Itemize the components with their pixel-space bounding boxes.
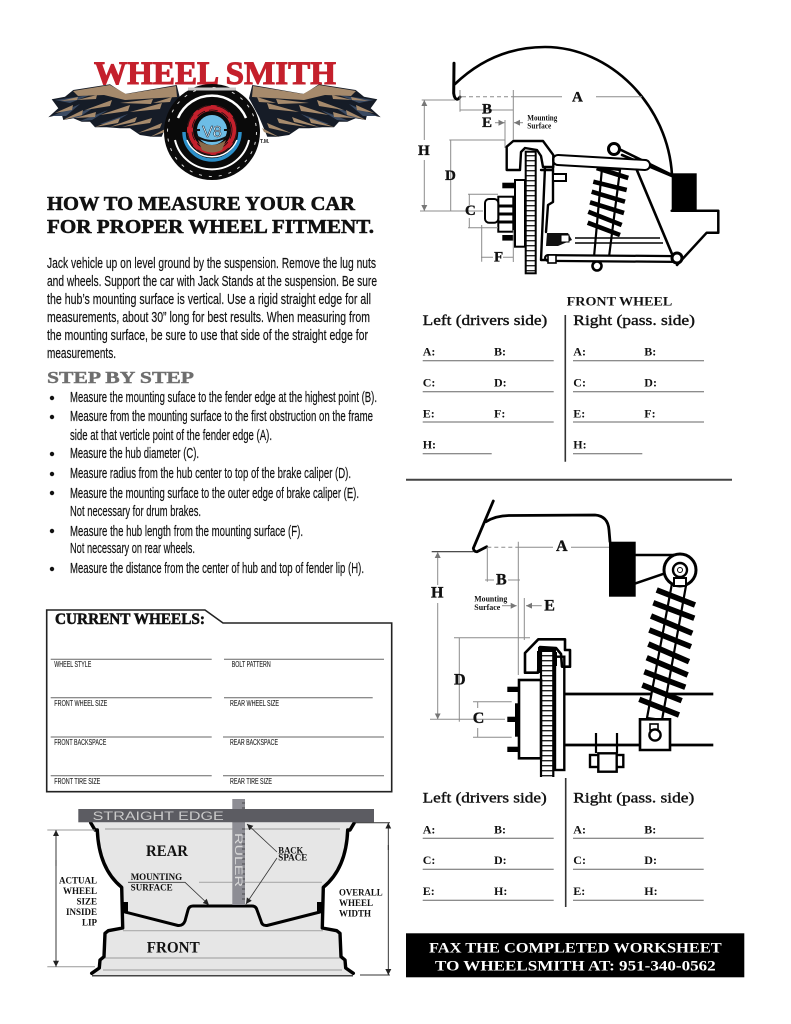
intro paragraph: Jack vehicle up on level ground by the suspension. Remove the lug nuts — [47, 255, 376, 272]
arrow: back space top — [247, 824, 277, 852]
label: actual wheel size: LIP — [82, 917, 97, 927]
frame rail — [609, 542, 636, 597]
field labels: F: — [644, 406, 656, 420]
intro paragraph: the mounting surface, be sure to use that side of the straight edge for — [47, 327, 368, 344]
icon: wheel badge: V8 — [202, 124, 222, 141]
title: FOR PROPER WHEEL FITMENT. — [47, 216, 374, 238]
field labels: H: — [644, 884, 658, 898]
intro paragraph: measurements. — [47, 345, 116, 362]
field lines — [423, 361, 704, 454]
column headings: Right (pass. side) — [573, 313, 695, 329]
dimension letters: E — [544, 598, 555, 615]
dimension letters: A — [556, 538, 568, 555]
step list — [50, 389, 377, 577]
label: mounting surface — [474, 594, 508, 612]
diagram: front suspension — [418, 47, 718, 273]
callout: fax banner — [406, 933, 744, 977]
label: actual wheel size: INSIDE — [66, 907, 97, 917]
spindle — [541, 167, 555, 260]
intro paragraph: the hub’s mounting surface is vertical. Use a rigid straight edge for all — [47, 291, 371, 308]
field labels: B: — [644, 345, 656, 359]
form labels: FRONT BACKSPACE — [54, 737, 106, 747]
heading: step by step: STEP BY STEP — [47, 368, 194, 387]
label: mounting surface: Mounting — [474, 594, 508, 604]
form labels: BOLT PATTERN — [232, 659, 271, 669]
frame — [672, 173, 697, 211]
panel heading: CURRENT WHEELS: — [55, 611, 205, 628]
field labels: C: — [573, 853, 586, 867]
callout: fax banner: TO WHEELSMITH AT: 951-340-0562 — [435, 959, 716, 975]
form heading: FRONT WHEEL — [567, 294, 673, 309]
field labels: A: — [423, 345, 435, 359]
dimension letters: B — [482, 102, 492, 118]
hub and studs — [507, 680, 541, 758]
label: mounting surface: Mounting — [527, 114, 557, 123]
form labels: FRONT TIRE SIZE — [54, 776, 101, 786]
field labels: A: — [423, 822, 435, 836]
dimension letters: H — [431, 585, 444, 602]
brake caliper — [507, 141, 553, 170]
title — [47, 193, 374, 238]
field labels: H: — [494, 884, 507, 898]
label: mounting surface: Surface — [474, 602, 501, 612]
logo: Wheel Smith winged wheel — [48, 56, 381, 180]
intro paragraph: measurements, about 30” long for best results. When measuring from — [47, 309, 370, 326]
field labels: C: — [573, 376, 586, 390]
icon: wheel badge — [164, 84, 260, 180]
label: rear: REAR — [146, 843, 189, 860]
field labels: F: — [494, 406, 505, 420]
label: back space: BACK — [278, 845, 303, 855]
arrow: mounting surface leader — [128, 882, 209, 905]
field labels: D: — [644, 853, 657, 867]
dimension: overall width — [355, 823, 390, 975]
dimension letters: B — [496, 571, 507, 588]
step list: Measure the hub diameter (C). — [70, 445, 199, 462]
step list: Not necessary for drum brakes. — [70, 503, 201, 520]
arrow: back space bottom — [246, 858, 277, 904]
field labels: D: — [494, 853, 507, 867]
label: back space — [278, 845, 307, 863]
fender — [454, 63, 460, 99]
field labels: D: — [644, 376, 657, 390]
dimension letters: F — [494, 250, 503, 266]
brake backing plate — [555, 657, 564, 770]
label: mounting surface — [131, 872, 182, 893]
brake caliper — [525, 639, 570, 673]
field labels: C: — [423, 376, 435, 390]
dimension letters: H — [418, 143, 430, 159]
field labels — [423, 822, 658, 898]
step list: Measure the mounting suface to the fender edge at the highest point (B). — [70, 389, 377, 406]
field labels: C: — [423, 853, 435, 867]
form labels: REAR BACKSPACE — [230, 737, 278, 747]
field labels: E: — [573, 884, 585, 898]
label: back space: SPACE — [278, 853, 307, 863]
label: overall wheel width: WHEEL — [339, 898, 373, 908]
column headings: Right (pass. side) — [573, 791, 694, 807]
axle clip — [590, 733, 623, 772]
label: overall wheel width: WIDTH — [339, 909, 371, 919]
panel: current wheels — [47, 610, 392, 792]
label: mounting surface: MOUNTING — [131, 872, 182, 882]
step list: Measure the hub length from the mounting surface (F). — [70, 523, 303, 540]
hub and studs — [485, 180, 525, 247]
label: mounting surface — [527, 114, 557, 130]
field labels: A: — [573, 822, 586, 836]
icon: left wing — [48, 84, 180, 137]
dimension letters: C — [473, 710, 484, 727]
form labels: REAR TIRE SIZE — [230, 776, 272, 786]
label: actual wheel size: WHEEL — [63, 886, 97, 896]
field lines — [423, 838, 704, 900]
field labels: A: — [573, 345, 586, 359]
label: overall wheel width: OVERALL — [339, 887, 383, 897]
icon: right wing — [249, 84, 381, 137]
label: mounting surface: SURFACE — [131, 883, 173, 893]
title: HOW TO MEASURE YOUR CAR — [47, 193, 356, 215]
dimension letters: E — [482, 115, 492, 131]
dimension letters: A — [572, 90, 583, 106]
brake rotor — [541, 648, 553, 777]
form: rear wheel — [423, 791, 704, 900]
field labels: B: — [494, 822, 506, 836]
straight edge: STRAIGHT EDGE — [93, 811, 224, 823]
ruler: RULER — [232, 833, 244, 887]
field labels: E: — [423, 884, 435, 898]
label: front: FRONT — [147, 939, 200, 956]
form lines — [51, 659, 384, 776]
suspension arms — [548, 144, 682, 263]
label: overall wheel width — [339, 887, 383, 919]
step list: Measure from the mounting surface to the first obstruction on the frame — [70, 408, 373, 425]
straight edge — [78, 809, 374, 823]
field labels: D: — [494, 376, 507, 390]
dimension letters: D — [454, 671, 466, 688]
form: front wheel — [423, 294, 704, 462]
field labels: H: — [423, 437, 436, 451]
field labels: E: — [573, 406, 585, 420]
lower shock bracket — [640, 719, 670, 750]
field labels: B: — [494, 345, 506, 359]
intro paragraph: and wheels. Support the car with Jack Stands at the suspension. Be sure — [47, 273, 377, 290]
upper shock eye — [664, 554, 696, 586]
brake rotor — [526, 152, 536, 273]
field labels: B: — [644, 822, 656, 836]
label: actual wheel size: SIZE — [76, 896, 97, 906]
field labels — [423, 345, 657, 451]
column headings — [423, 313, 695, 329]
form labels: REAR WHEEL SIZE — [230, 698, 279, 708]
dimension lines — [430, 542, 609, 737]
logo wordmark: WHEEL SMITH — [94, 56, 336, 92]
wheel body — [91, 823, 354, 976]
fender — [473, 501, 493, 552]
form labels: FRONT WHEEL SIZE — [54, 698, 108, 708]
step list: Measure the distance from the center of hub and top of fender lip (H). — [70, 560, 364, 577]
axle housings — [565, 694, 713, 745]
wheel mounting pad — [125, 906, 320, 926]
diagram: rear suspension — [430, 501, 713, 907]
column headings — [423, 791, 694, 807]
label: mounting surface: Surface — [527, 121, 552, 130]
step list: Not necessary on rear wheels. — [70, 540, 195, 557]
dimension lines — [420, 90, 642, 262]
dimension letters: D — [445, 168, 456, 184]
label: actual wheel size: ACTUAL — [59, 875, 97, 885]
form labels — [54, 659, 279, 786]
label: actual wheel size — [59, 875, 97, 927]
ruler — [232, 799, 245, 905]
dimension letters: C — [465, 203, 476, 219]
step list: Measure radius from the hub center to top of the brake caliper (D). — [70, 465, 351, 482]
callout: fax banner: FAX THE COMPLETED WORKSHEET — [429, 940, 722, 956]
field labels: E: — [423, 406, 435, 420]
dimension: actual width — [47, 830, 95, 967]
step list: side at that verticle point of the fender edge (A). — [70, 427, 272, 444]
field labels: H: — [573, 437, 587, 451]
dimension letters — [431, 538, 568, 727]
step list: Measure the mounting surface to the outer edge of brake caliper (E). — [70, 485, 359, 502]
column headings: Left (drivers side) — [423, 791, 547, 807]
dimension letters — [418, 90, 583, 266]
column headings: Left (drivers side) — [423, 313, 547, 329]
intro paragraph — [47, 255, 377, 362]
trademark: T.M. — [260, 139, 270, 145]
coil spring — [588, 168, 628, 270]
form labels: WHEEL STYLE — [54, 659, 92, 669]
diagram: wheel cross-section — [47, 799, 390, 976]
shock absorber — [639, 578, 695, 720]
